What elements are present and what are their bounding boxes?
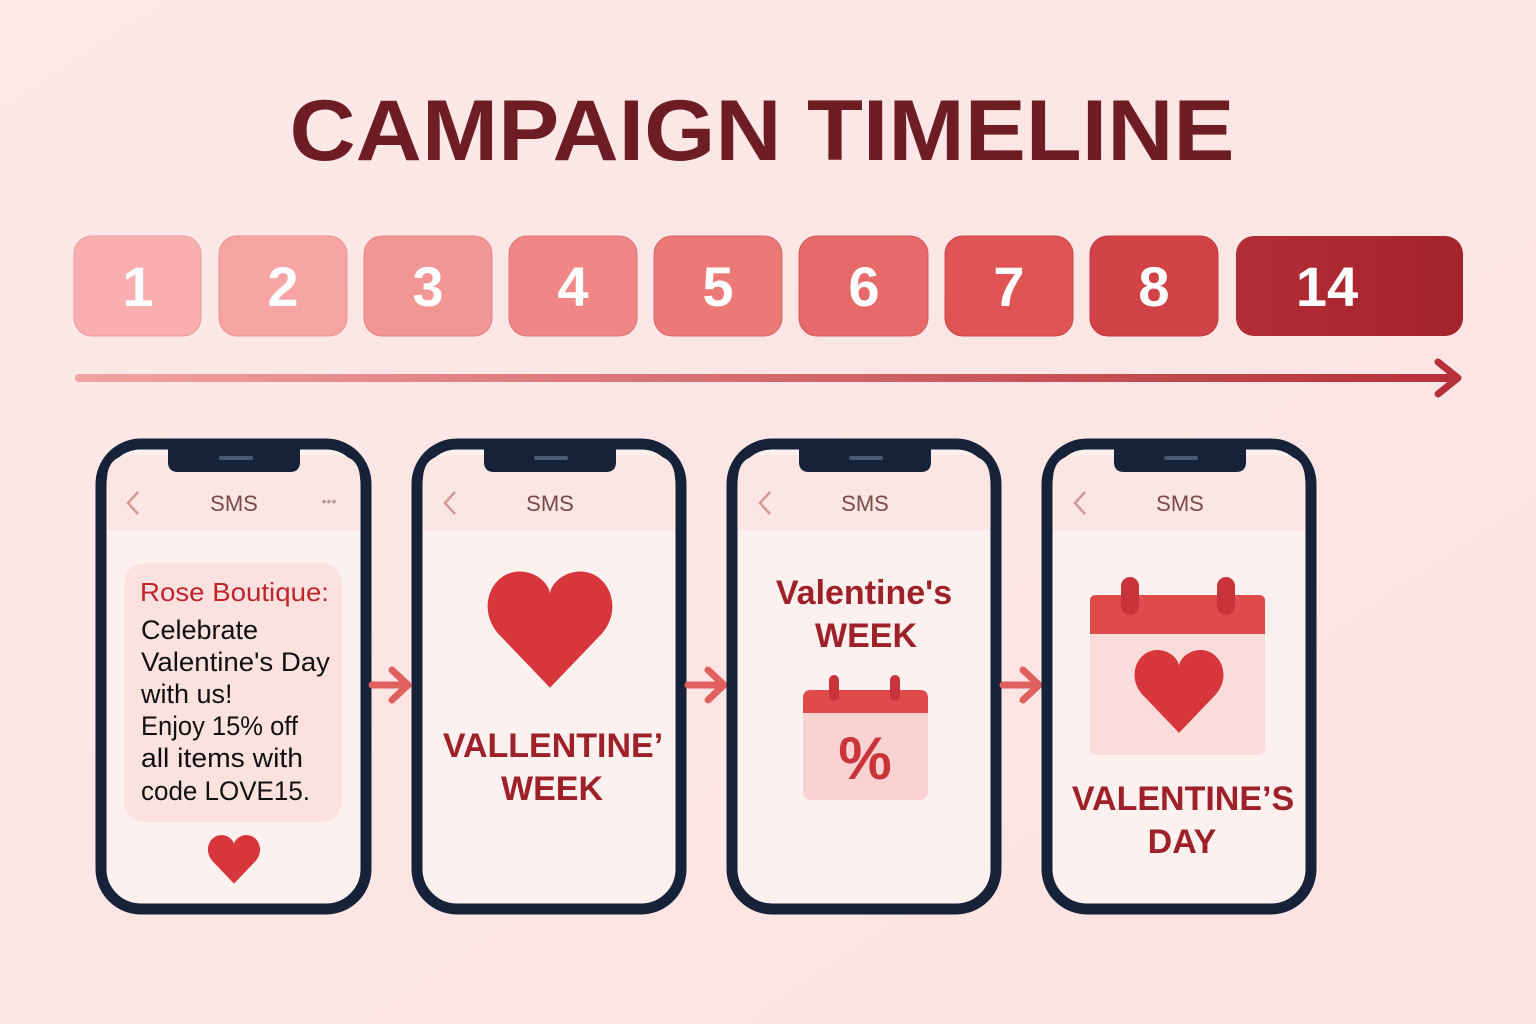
day 5: 5 xyxy=(702,255,734,318)
icon: calendar heart xyxy=(1090,577,1265,755)
text: valentine's day: VALENTINE’S xyxy=(1072,780,1294,818)
text: valentine's week xyxy=(776,574,952,655)
day boxes xyxy=(74,236,1463,336)
timeline arrow xyxy=(75,362,1458,394)
text: valentine's week: WEEK xyxy=(815,617,917,655)
message bubble: Enjoy 15% off xyxy=(141,711,298,741)
day 8 xyxy=(1090,236,1218,336)
icon: heart xyxy=(488,572,612,688)
phone 2: SMS xyxy=(526,491,574,516)
phone 1 xyxy=(101,444,366,909)
text: valentine's day xyxy=(1072,780,1294,861)
icon: heart xyxy=(208,835,260,884)
day 8: 8 xyxy=(1138,255,1170,318)
message bubble xyxy=(124,563,342,822)
phone 1: ••• xyxy=(322,493,336,509)
phone 1: SMS xyxy=(210,491,258,516)
day 6 xyxy=(799,236,928,336)
message bubble: with us! xyxy=(140,679,233,709)
arrow 2 xyxy=(688,670,724,700)
icon: calendar percent xyxy=(803,675,928,800)
message bubble: Valentine's Day xyxy=(141,647,331,677)
day 4 xyxy=(509,236,637,336)
text: valentine's week: Valentine's xyxy=(776,574,952,612)
text: valentine week xyxy=(443,727,663,808)
title: CAMPAIGN TIMELINE xyxy=(290,83,1234,179)
day 14 xyxy=(1236,236,1463,336)
day 2: 2 xyxy=(267,255,299,318)
day 7: 7 xyxy=(993,255,1025,318)
day 3 xyxy=(364,236,492,336)
text: valentine week: WEEK xyxy=(501,770,603,808)
message bubble: Rose Boutique: xyxy=(140,577,329,607)
phone 3 xyxy=(732,444,996,909)
day 7 xyxy=(945,236,1073,336)
arrow 1 xyxy=(372,670,408,700)
day 6: 6 xyxy=(848,255,880,318)
phone 4 xyxy=(1047,444,1311,909)
day 4: 4 xyxy=(557,255,589,318)
message bubble: code LOVE15. xyxy=(141,776,310,806)
message bubble: Celebrate xyxy=(141,615,258,645)
phone 2 xyxy=(417,444,681,909)
text: valentine's day: DAY xyxy=(1148,823,1217,861)
arrow 3 xyxy=(1003,670,1039,700)
day 1 xyxy=(74,236,201,336)
day 5 xyxy=(654,236,782,336)
text: valentine week: VALLENTINE’ xyxy=(443,727,663,765)
icon: calendar percent: % xyxy=(838,725,892,792)
message bubble: all items with xyxy=(141,743,303,773)
day 3: 3 xyxy=(412,255,444,318)
phone 4: SMS xyxy=(1156,491,1204,516)
phone 3: SMS xyxy=(841,491,889,516)
day 2 xyxy=(219,236,347,336)
day 1: 1 xyxy=(122,255,154,318)
day 14: 14 xyxy=(1296,255,1358,318)
